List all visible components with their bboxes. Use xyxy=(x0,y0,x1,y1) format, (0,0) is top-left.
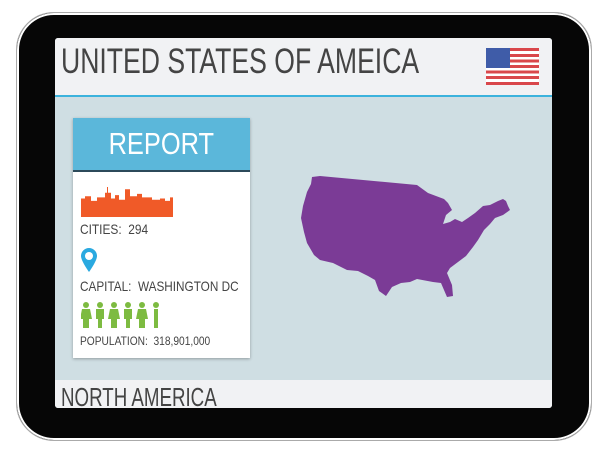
population text: POPULATION: 318,901,000 xyxy=(80,334,210,348)
capital text: CAPITAL: WASHINGTON DC xyxy=(80,278,239,294)
report heading: REPORT xyxy=(109,126,214,161)
footer bar xyxy=(55,380,552,408)
footer text: NORTH AMERICA xyxy=(61,382,217,412)
header bar xyxy=(55,38,552,97)
cities text: CITIES: 294 xyxy=(80,221,148,237)
icon: location pin xyxy=(81,248,97,272)
title: UNITED STATES OF AMEICA xyxy=(61,42,419,81)
screen xyxy=(55,38,552,408)
panel: report xyxy=(73,118,250,358)
report heading xyxy=(73,118,250,172)
icon: people xyxy=(81,302,159,328)
icon: US flag xyxy=(486,48,539,85)
icon: skyline xyxy=(81,187,173,217)
